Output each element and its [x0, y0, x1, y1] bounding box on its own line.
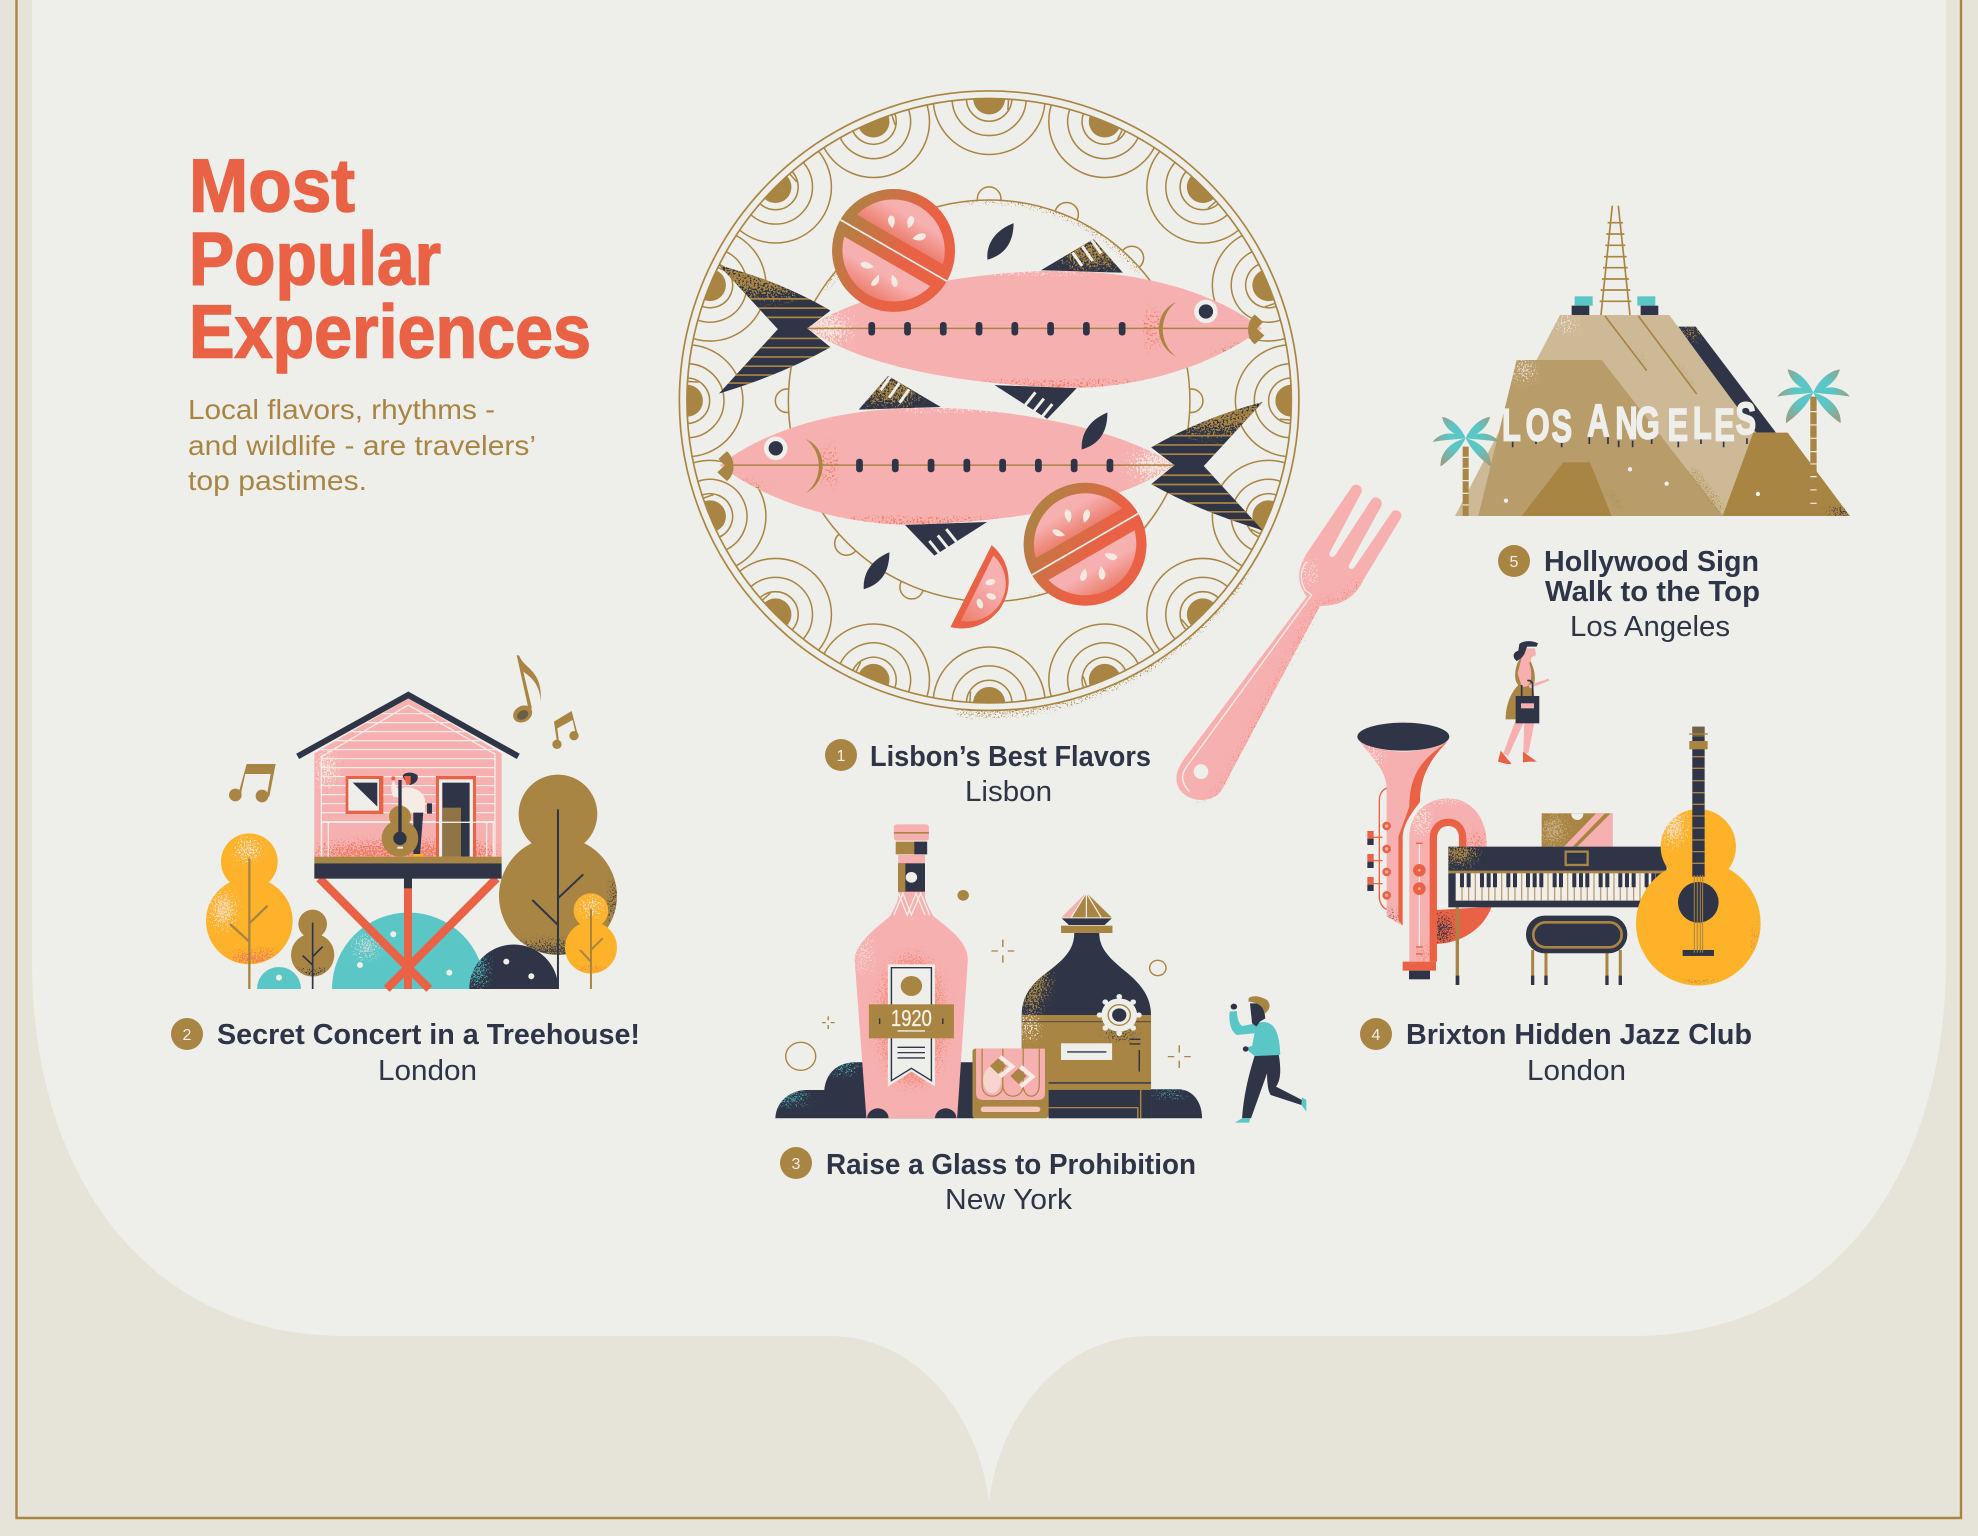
running man [1229, 996, 1306, 1123]
badge 2: 2 [183, 1027, 192, 1044]
title: Popular [189, 216, 441, 300]
navy slope [1678, 326, 1776, 433]
hill dots [1504, 467, 1760, 503]
guitar [1636, 727, 1761, 988]
caption 3: New York [945, 1184, 1073, 1216]
woman with bag [1498, 641, 1549, 764]
leaves [864, 223, 1107, 589]
plate rim [679, 91, 1299, 711]
fork highlight [1183, 562, 1312, 792]
bottle label [888, 964, 935, 1087]
decanter [1022, 893, 1151, 1118]
navy bush [469, 944, 558, 989]
piano [1442, 845, 1667, 985]
plate scallop pattern [631, 43, 1347, 759]
palm left [1433, 417, 1499, 516]
caption 1 [825, 739, 1151, 808]
upper sardine [706, 238, 1270, 419]
teal bushes [257, 912, 485, 989]
caption 4: London [1527, 1055, 1626, 1087]
mouth [1248, 314, 1264, 344]
illustration: plate with sardines [678, 90, 1300, 720]
front peaks [1522, 433, 1855, 519]
music notes right [510, 655, 579, 749]
tuba bell [1357, 723, 1449, 926]
bush grain and dots [276, 931, 452, 981]
whiskey glass [972, 1049, 1049, 1118]
fish body grain [790, 265, 1270, 400]
right yellow tree [565, 893, 617, 989]
plate shadow grain [955, 560, 1249, 711]
house siding [313, 705, 500, 862]
antenna tower [1600, 206, 1631, 315]
title: Most [189, 144, 355, 228]
illustration: fork [1176, 485, 1401, 805]
badge 3: 3 [792, 1156, 801, 1173]
inner plate bumps [775, 187, 1203, 615]
caption 5 [1498, 545, 1760, 643]
bottle neck [890, 855, 933, 916]
music notes left [229, 764, 276, 802]
tomato slice upper [815, 176, 972, 325]
caption 1: Lisbon [965, 776, 1052, 808]
navy hills [771, 1061, 1202, 1118]
small gold tree [291, 910, 334, 989]
pink bottle [855, 824, 968, 1128]
ventral fin [995, 385, 1077, 419]
plate rim grain bottom right [946, 585, 1228, 697]
badge 1 [825, 739, 857, 771]
caption 2: London [378, 1055, 477, 1087]
lateral line [807, 327, 1249, 330]
caption 5: Hollywood Sign [1544, 546, 1759, 578]
lower sardine [711, 375, 1275, 556]
decanter rosette [1097, 994, 1142, 1036]
caption 5: Walk to the Top [1545, 576, 1760, 608]
inner plate grain [824, 200, 1140, 596]
window [346, 776, 383, 814]
badge 5 [1498, 545, 1530, 577]
big gold tree [499, 775, 621, 989]
inner plate [788, 200, 1190, 601]
sign posts [1513, 437, 1747, 447]
house wall [314, 698, 502, 857]
caption 4: Brixton Hidden Jazz Club [1406, 1019, 1752, 1051]
fork grain [1210, 562, 1363, 800]
subtitle text block: Local flavors, rhythms - [188, 394, 495, 425]
subtitle text block [188, 394, 536, 496]
caption 2: Secret Concert in a Treehouse! [217, 1019, 640, 1051]
caption 5: Los Angeles [1570, 611, 1730, 643]
sheet music [1542, 813, 1613, 847]
badge 4 [1360, 1018, 1392, 1050]
fork shadow grain [1187, 608, 1320, 805]
piano stool [1526, 916, 1627, 985]
rooftop boxes [1572, 296, 1658, 315]
bones [868, 322, 1126, 335]
illustration: bottles [771, 824, 1306, 1128]
subtitle text block: and wildlife - are travelers’ [188, 430, 536, 461]
subtitle text block: top pastimes. [188, 465, 367, 496]
caption 2 [171, 1018, 640, 1087]
eye [1194, 300, 1218, 323]
decorations [786, 890, 1191, 1070]
fork body [1176, 485, 1401, 800]
tail fin [706, 261, 837, 400]
musician with guitar [382, 773, 432, 857]
roof [298, 695, 518, 756]
light mountain [1455, 315, 1757, 516]
caption 3: Raise a Glass to Prohibition [826, 1149, 1196, 1181]
middle mountain [1478, 360, 1723, 516]
title [189, 144, 591, 374]
tomato slice lower [1006, 469, 1164, 619]
gill [1159, 302, 1176, 357]
fork hole [1194, 764, 1208, 779]
tomato wedge [950, 545, 1009, 629]
badge 4: 4 [1372, 1027, 1381, 1044]
badge 3 [780, 1147, 812, 1179]
illustration: Los Angeles hill [1433, 206, 1855, 519]
caption 4 [1360, 1018, 1752, 1087]
badge 5: 5 [1510, 554, 1519, 571]
illustration: instruments [1357, 641, 1761, 988]
palm right [1777, 369, 1850, 516]
door [436, 776, 476, 857]
illustration: treehouse [206, 655, 621, 989]
railing [322, 822, 493, 857]
tuba tube [1403, 796, 1487, 979]
caption 3 [780, 1147, 1196, 1216]
left yellow tree [206, 833, 293, 989]
sign text: LOS ANGELES [1502, 394, 1756, 452]
badge 2 [171, 1018, 203, 1050]
fish body [807, 271, 1262, 388]
stilts [319, 878, 497, 989]
title: Experiences [189, 290, 591, 374]
tuba valves [1367, 788, 1390, 909]
pink bottle: 1920 [891, 1006, 932, 1031]
caption 1: Lisbon’s Best Flavors [870, 741, 1151, 773]
tuba bottom curve [1434, 907, 1492, 944]
badge 1: 1 [837, 748, 846, 765]
deck [314, 857, 502, 879]
dorsal fin [1039, 238, 1127, 274]
